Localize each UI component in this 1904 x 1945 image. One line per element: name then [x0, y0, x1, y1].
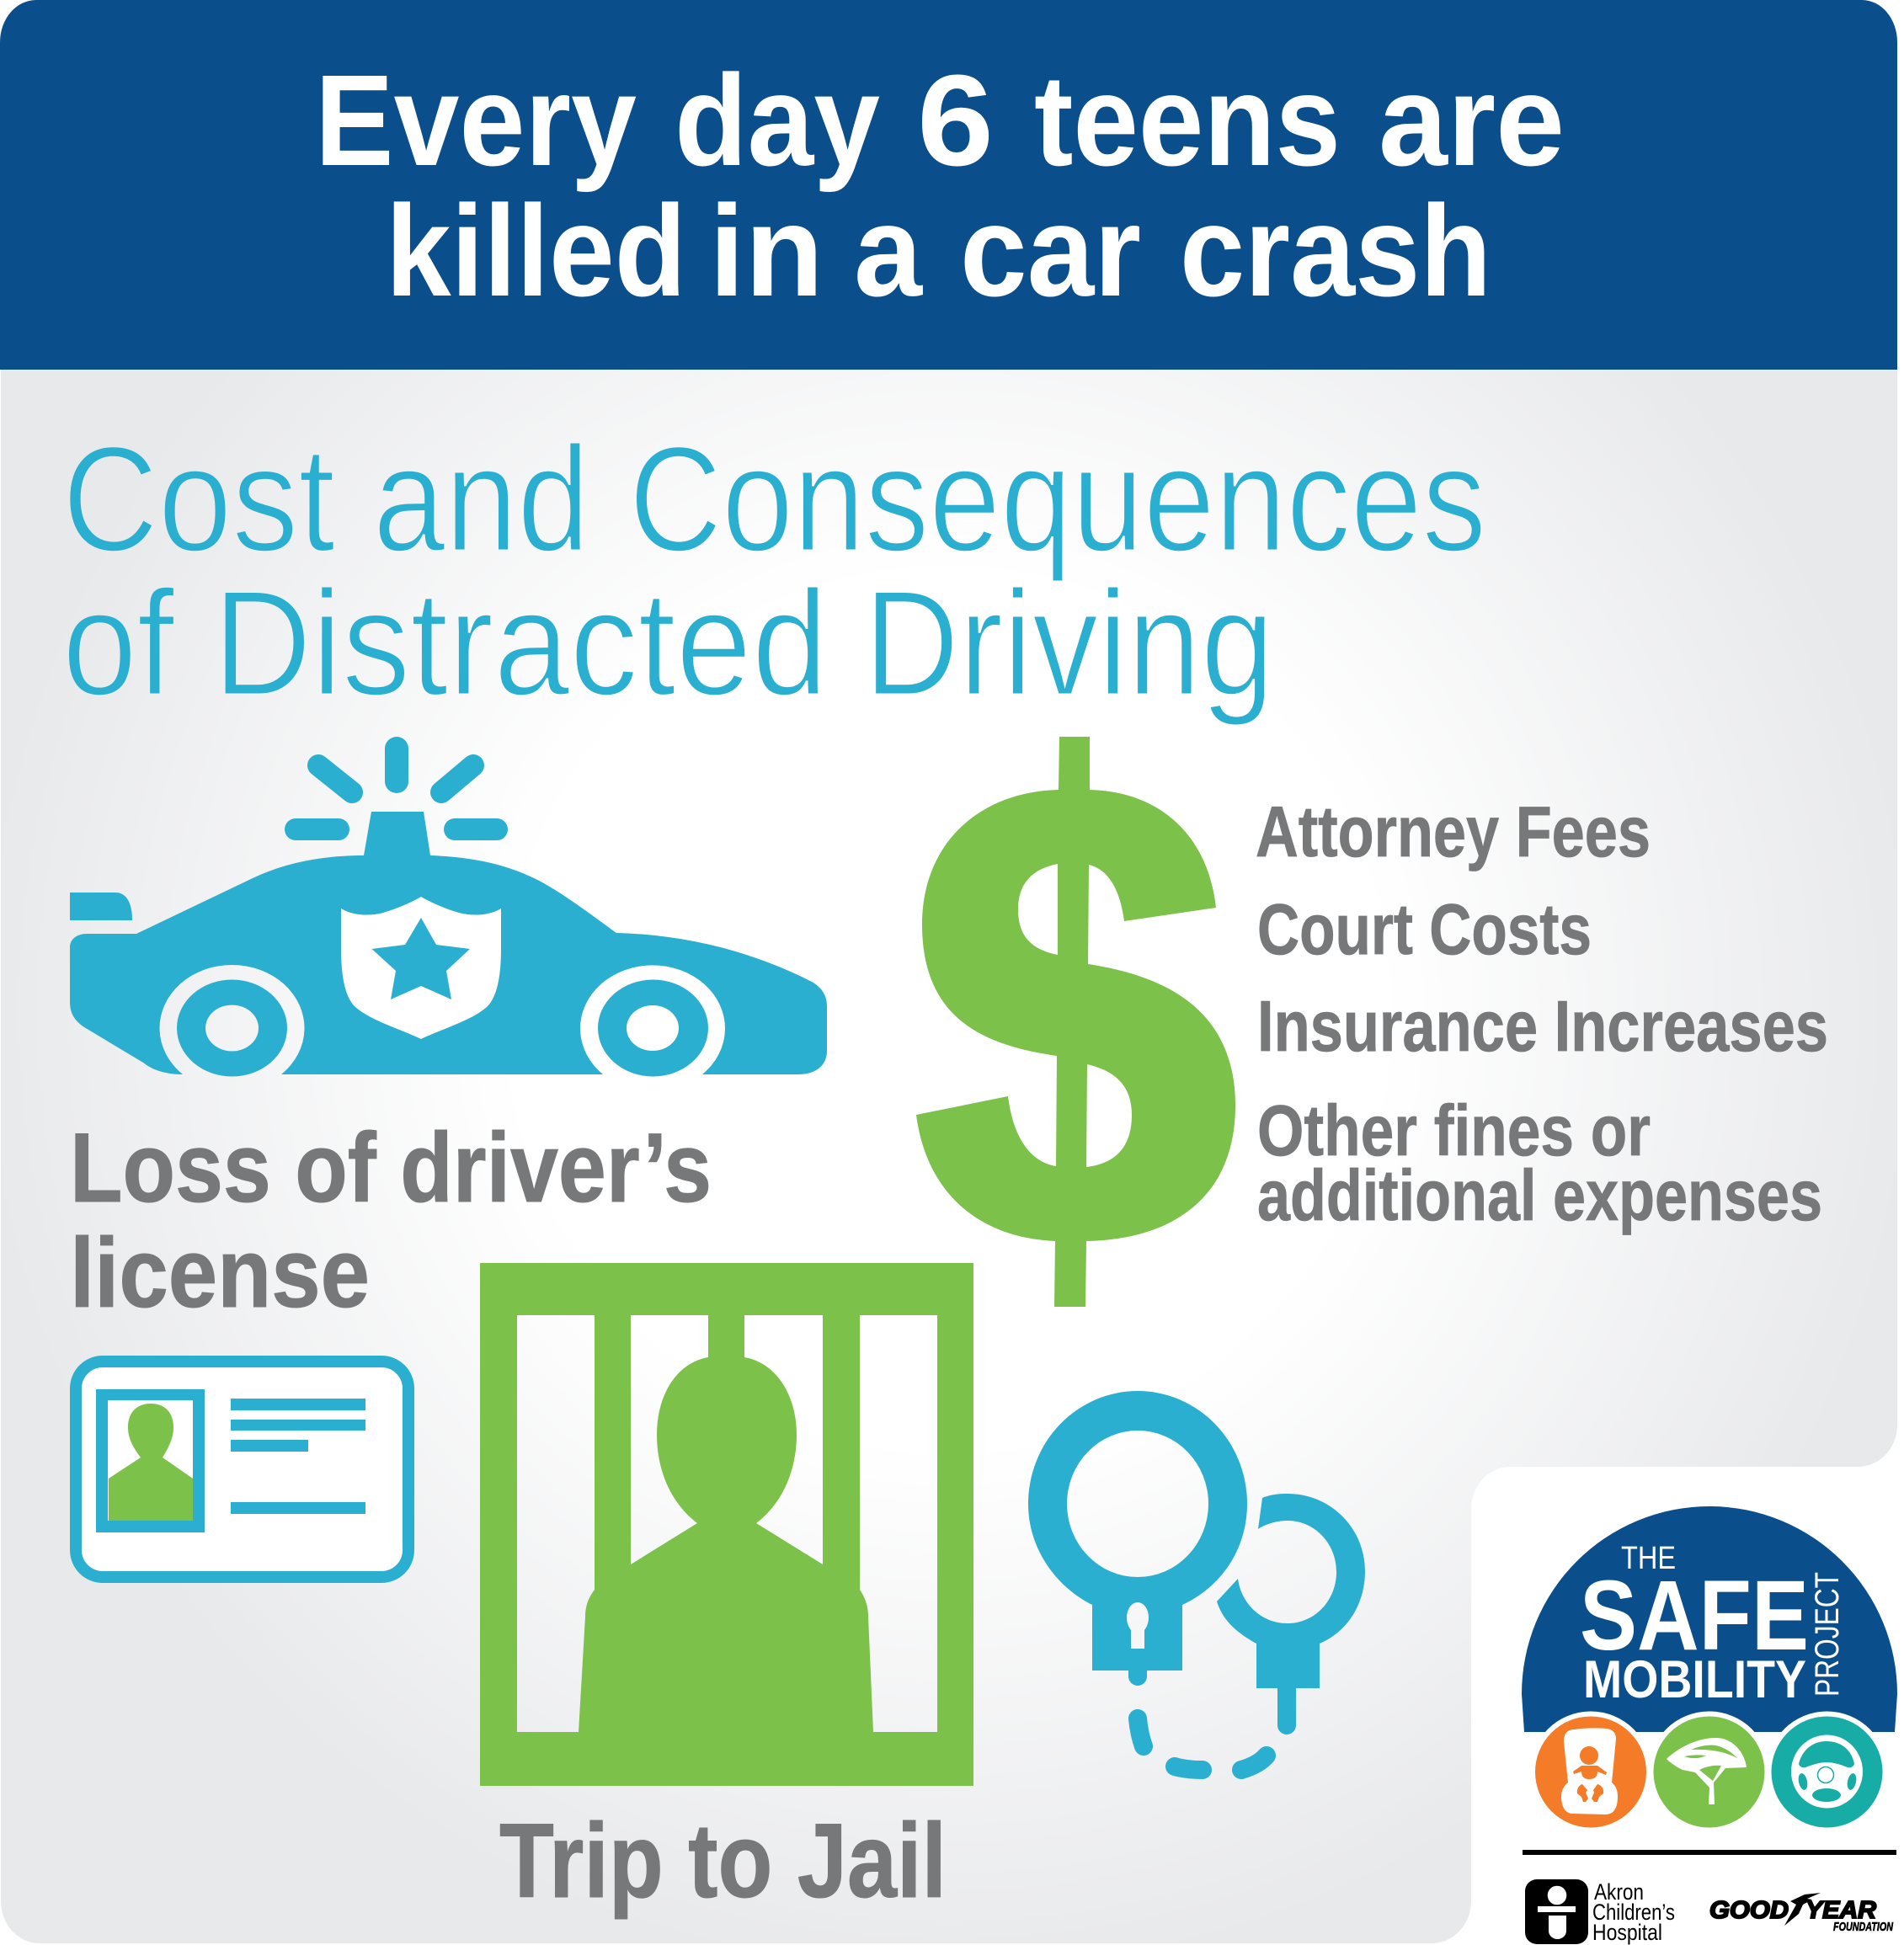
logo: akron children's hospital: Hospital — [1592, 1920, 1662, 1945]
icon: child car seat — [1561, 1728, 1618, 1814]
header banner: 6 — [917, 48, 994, 193]
heading: cost and consequences: Distracted — [213, 559, 828, 727]
text: trip to jail: Trip to Jail — [499, 1803, 947, 1920]
heading: cost and consequences: Cost — [62, 415, 335, 583]
header banner: killed — [386, 179, 686, 323]
icon: police car — [70, 749, 827, 1076]
text: list of costs: Attorney Fees — [1256, 792, 1651, 872]
header banner: Every — [315, 48, 637, 193]
icon: handcuffs — [1028, 1391, 1365, 1770]
logo: goodyear foundation: YEAR — [1805, 1897, 1876, 1924]
logo: the safe mobility project: THE — [1621, 1541, 1676, 1576]
header banner: day — [675, 48, 880, 193]
logo: the safe mobility project: MOBILITY — [1583, 1650, 1806, 1709]
icon: driver's license card — [76, 1362, 408, 1577]
logo: akron children's hospital — [1525, 1879, 1675, 1945]
heading: cost and consequences: Consequences — [629, 415, 1486, 583]
logo: akron children's hospital: Children’s — [1592, 1900, 1675, 1925]
text: loss of driver's license: Loss of driver’s — [70, 1112, 712, 1223]
heading: cost and consequences — [62, 415, 1486, 727]
logo: the safe mobility project — [1522, 1506, 1897, 1832]
logo: akron children's hospital: Akron — [1594, 1879, 1644, 1905]
text: list of costs: Other fines or — [1257, 1091, 1651, 1171]
heading: cost and consequences: of — [62, 559, 174, 727]
header banner: car — [960, 179, 1141, 323]
logo: goodyear foundation — [1709, 1893, 1894, 1934]
header banner: crash — [1180, 179, 1491, 323]
icon: bicycle helmet — [1667, 1738, 1747, 1804]
divider line in logo block — [1523, 1850, 1896, 1855]
header banner: a — [854, 179, 923, 323]
header banner — [0, 0, 1897, 370]
text: loss of driver's license: license — [70, 1218, 370, 1328]
heading: cost and consequences: Driving — [864, 559, 1274, 727]
text: list of costs — [1256, 792, 1828, 1236]
header banner: teens — [1034, 48, 1341, 193]
logo: the safe mobility project: SAFE — [1580, 1560, 1809, 1671]
text: list of costs: Court Costs — [1257, 890, 1592, 970]
icon: person behind jail bars — [480, 1263, 973, 1786]
heading: cost and consequences: and — [373, 415, 589, 583]
icon: dollar sign — [916, 737, 1235, 1307]
header banner: are — [1379, 48, 1565, 193]
icon: steering wheel — [1791, 1735, 1863, 1809]
logo: goodyear foundation: GOOD — [1709, 1897, 1789, 1924]
logo: the safe mobility project: PROJECT — [1809, 1572, 1846, 1697]
header banner: in — [709, 179, 824, 323]
text: loss of driver's license — [70, 1112, 712, 1328]
